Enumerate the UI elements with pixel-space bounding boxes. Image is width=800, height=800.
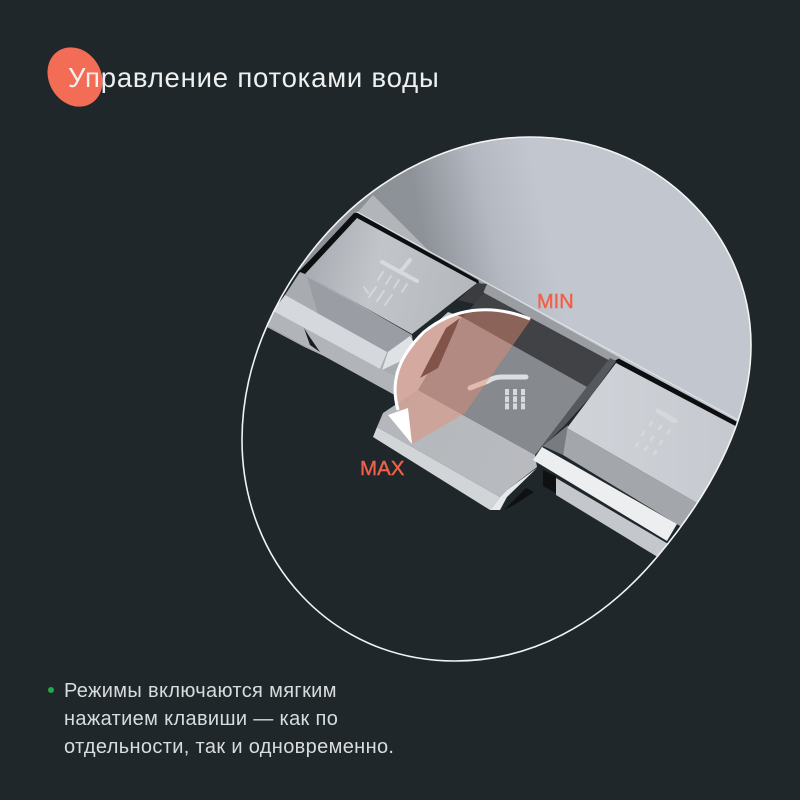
label MIN: MIN xyxy=(537,291,574,313)
dark cover under keys xyxy=(266,327,394,394)
right key xyxy=(533,363,736,556)
icon: overhead shower xyxy=(364,260,417,305)
title: Управление потоками воды xyxy=(68,62,440,93)
left key xyxy=(262,218,487,400)
icon: hand shower xyxy=(470,377,526,410)
bullet dot xyxy=(48,687,54,693)
bullet text: Режимы включаются мягким xyxy=(64,680,337,702)
centre pressed key xyxy=(373,312,616,510)
icon: arrow head xyxy=(388,408,412,444)
label MAX: MAX xyxy=(360,457,405,480)
slot behind pressed key xyxy=(462,293,610,388)
arc arrow line xyxy=(395,310,530,410)
panel: product photo xyxy=(241,136,752,662)
icon: rain shower xyxy=(636,411,675,454)
egg outline xyxy=(242,137,751,661)
title blob xyxy=(37,37,113,117)
adjustment sector overlay xyxy=(388,310,532,444)
top chrome plate xyxy=(298,138,750,426)
bullet text: отдельности, так и одновременно. xyxy=(64,736,394,758)
bullet text: нажатием клавиши — как по xyxy=(64,708,338,730)
